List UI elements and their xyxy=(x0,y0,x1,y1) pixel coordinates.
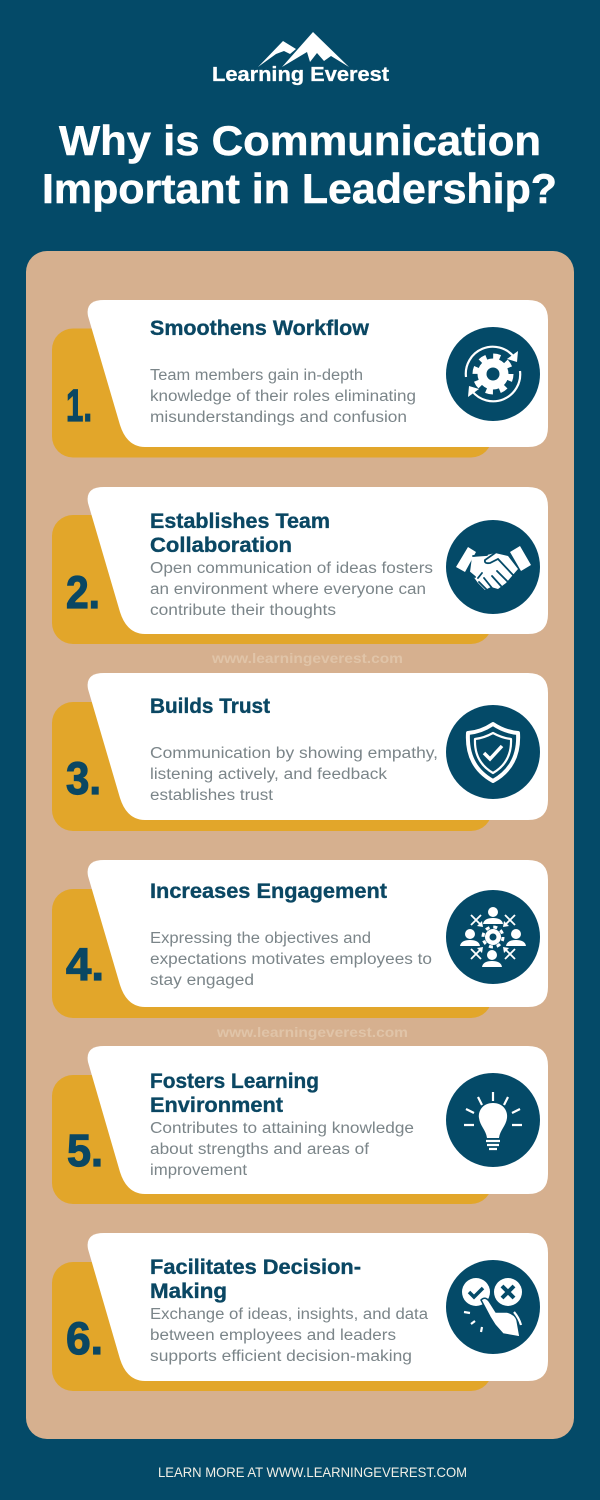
card 4: Increases Engagement: 4. xyxy=(66,939,104,990)
card 3: Builds Trust xyxy=(52,673,548,831)
card 6: Facilitates Decision-Making: supports efficient decision-making xyxy=(150,1348,412,1365)
card 2: Establishes Team Collaboration: an environment where everyone can xyxy=(150,581,426,598)
title: Why is Communication xyxy=(59,117,541,164)
card 4: Increases Engagement: stay engaged xyxy=(150,972,254,989)
icon: people around a gear xyxy=(446,890,540,984)
icon: hand choosing check or cross xyxy=(446,1260,540,1354)
card 4: Increases Engagement xyxy=(52,860,548,1018)
footer: LEARN MORE AT WWW.LEARNINGEVEREST.COM xyxy=(158,1464,467,1480)
logo: Learning Everest xyxy=(212,32,389,86)
icon: light bulb xyxy=(446,1073,540,1167)
card 6: Facilitates Decision-Making: Making xyxy=(150,1280,227,1303)
card 1: Smoothens Workflow xyxy=(52,300,548,458)
card 6: Facilitates Decision-Making: between employees and leaders xyxy=(150,1327,396,1344)
card 6: Facilitates Decision-Making xyxy=(52,1233,548,1391)
card 3: Builds Trust: Builds Trust xyxy=(150,695,270,718)
card 5: Fosters Learning Environment: Fosters Learning xyxy=(150,1070,319,1093)
title: Important in Leadership? xyxy=(42,165,557,212)
watermark: www.learningeverest.com xyxy=(216,1024,408,1040)
card 5: Fosters Learning Environment: Environment xyxy=(150,1094,283,1117)
card 5: Fosters Learning Environment: Contributes to attaining knowledge xyxy=(150,1120,414,1137)
card 3: Builds Trust: Communication by showing empathy, xyxy=(150,745,438,762)
card 3: Builds Trust: establishes trust xyxy=(150,787,274,804)
card 5: Fosters Learning Environment: 5. xyxy=(67,1125,103,1176)
card 4: Increases Engagement: Increases Engagement xyxy=(150,880,387,903)
title xyxy=(42,117,557,212)
watermark: www.learningeverest.com xyxy=(211,650,403,666)
card 6: Facilitates Decision-Making: Facilitates Decision- xyxy=(150,1256,361,1279)
card 2: Establishes Team Collaboration xyxy=(52,487,548,644)
card 1: Smoothens Workflow: misunderstandings and confusion xyxy=(150,409,407,426)
card 5: Fosters Learning Environment xyxy=(52,1046,548,1204)
card 5: Fosters Learning Environment: about strengths and areas of xyxy=(150,1141,370,1158)
icon: handshake xyxy=(446,520,540,614)
card 1: Smoothens Workflow: Smoothens Workflow xyxy=(150,317,370,340)
card 2: Establishes Team Collaboration: Establishes Team xyxy=(150,510,330,533)
card 5: Fosters Learning Environment: improvement xyxy=(150,1162,248,1179)
card 4: Increases Engagement: Expressing the objectives and xyxy=(150,930,371,947)
card 2: Establishes Team Collaboration: contribute their thoughts xyxy=(150,602,336,619)
card 6: Facilitates Decision-Making: Exchange of ideas, insights, and data xyxy=(150,1306,428,1323)
icon: shield with check xyxy=(446,705,540,799)
icon: gear with arrows xyxy=(446,327,540,421)
card 1: Smoothens Workflow: knowledge of their roles eliminating xyxy=(150,388,416,405)
card 3: Builds Trust: 3. xyxy=(66,753,101,804)
card 2: Establishes Team Collaboration: 2. xyxy=(66,567,100,618)
card 1: Smoothens Workflow: 1. xyxy=(66,380,92,431)
panel: tan background xyxy=(26,251,574,1439)
card 4: Increases Engagement: expectations motivates employees to xyxy=(150,951,432,968)
card 2: Establishes Team Collaboration: Collaboration xyxy=(150,534,292,557)
card 3: Builds Trust: listening actively, and feedback xyxy=(150,766,387,783)
card 1: Smoothens Workflow: Team members gain in-depth xyxy=(150,367,363,384)
card 2: Establishes Team Collaboration: Open communication of ideas fosters xyxy=(150,560,433,577)
logo: Learning Everest: Learning Everest xyxy=(212,63,389,86)
card 6: Facilitates Decision-Making: 6. xyxy=(66,1313,103,1364)
